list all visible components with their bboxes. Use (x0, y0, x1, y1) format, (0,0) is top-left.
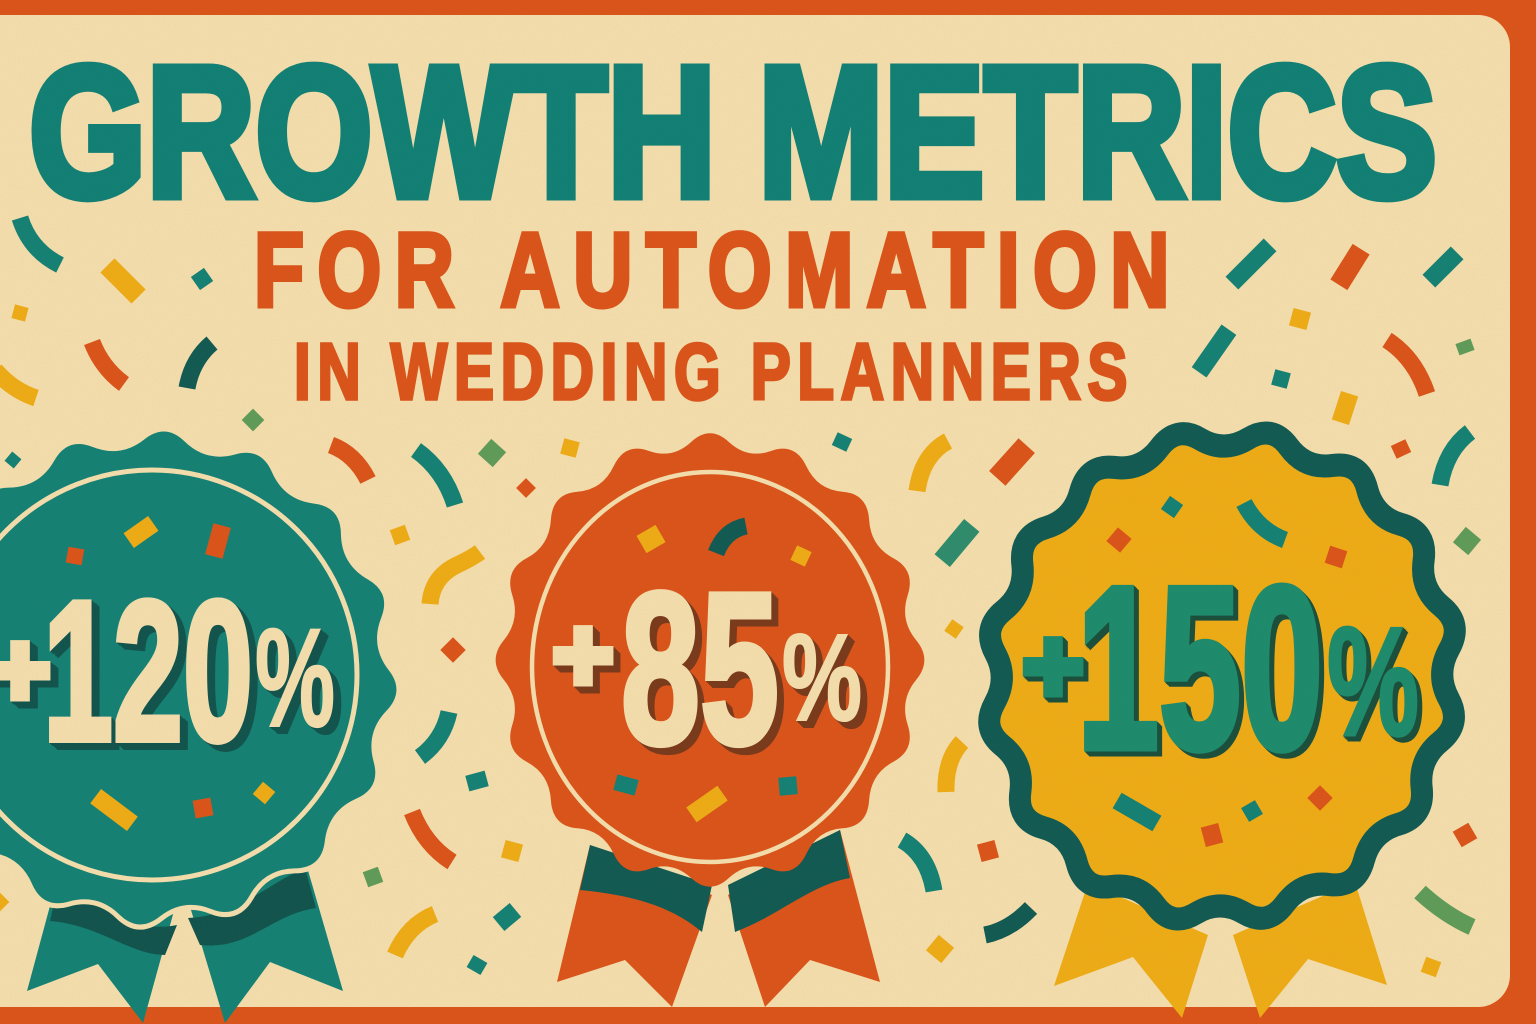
inner confetti (613, 525, 812, 822)
value: +120%: % (255, 599, 335, 756)
ribbon tails (27, 860, 343, 1023)
value: +85%: 85 (621, 547, 779, 789)
subtitle: In Wedding Planners: IN WEDDING PLANNERS (294, 327, 1134, 416)
confetti background (0, 218, 1481, 977)
value: +150%: + (1022, 608, 1084, 725)
rosette (496, 433, 924, 887)
value: +85%: % (782, 610, 862, 747)
inner confetti (66, 516, 275, 831)
badge 3: yellow +150% (942, 387, 1502, 1018)
value: +150%: 150 (1077, 539, 1323, 798)
subtitle: For Automation: FOR AUTOMATION (254, 211, 1183, 328)
value: +150%: % (1327, 595, 1419, 768)
value: +85%: + (552, 597, 614, 714)
ribbon tails (1054, 882, 1387, 1018)
inner confetti (1106, 496, 1347, 847)
ribbon tails (557, 830, 880, 1007)
badge 2: orange +85% (496, 433, 924, 1007)
inner ring (532, 472, 888, 862)
inner ring (0, 470, 357, 880)
badge 1: teal +120% (0, 416, 412, 1023)
rosette with dark outline (942, 387, 1502, 965)
value: +120%: 120 (43, 560, 253, 783)
rosette (0, 416, 412, 940)
